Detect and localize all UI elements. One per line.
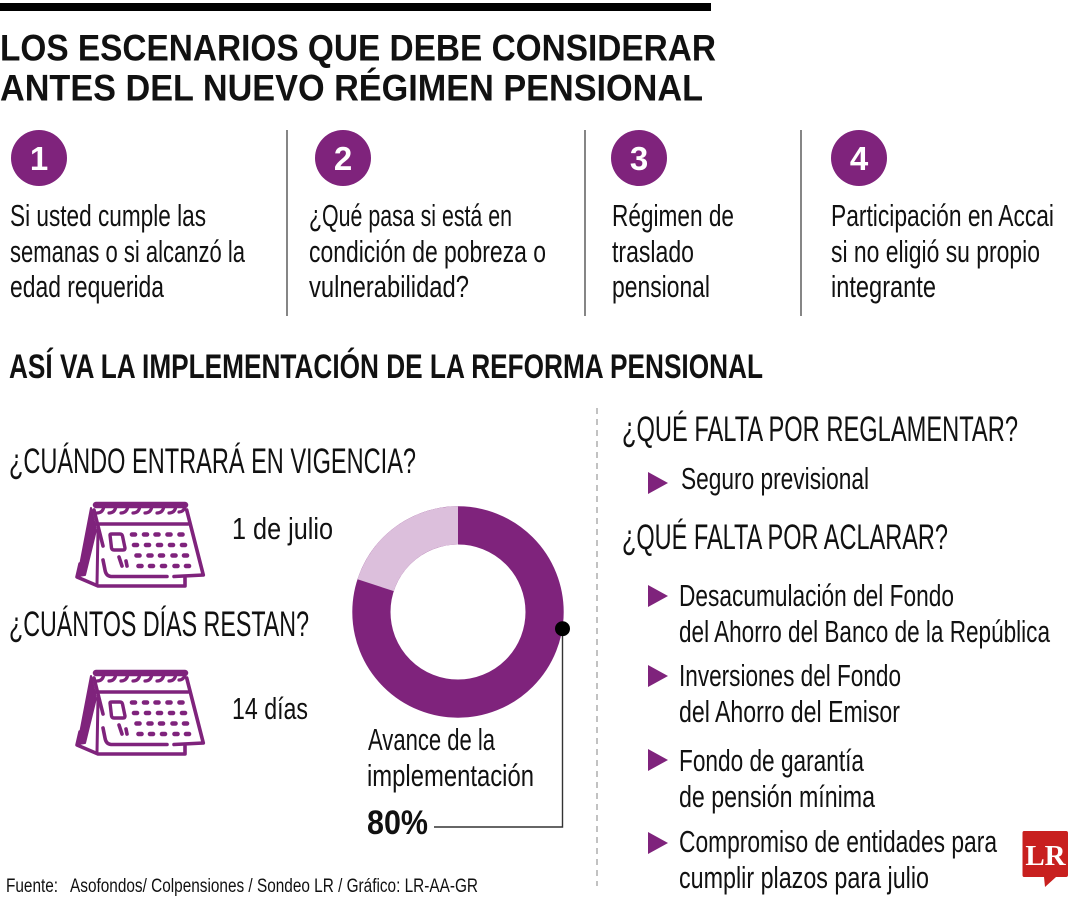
list item: compromiso: [648, 824, 998, 895]
icon: calendar: [77, 505, 203, 586]
donut chart: 80%: [358, 506, 545, 699]
list item: fondo de garantía: [648, 743, 876, 814]
callout text: implementación: [367, 758, 534, 793]
heading: cuándo entrará en vigencia: ¿CUÁNDO ENTRARÁ EN VIGENCIA?: [9, 442, 416, 481]
panel: scenario 1: semanas o si alcanzó la: [10, 234, 246, 269]
list item: desacumulación: Desacumulación del Fondo: [679, 578, 954, 613]
panel: scenario 3: [611, 130, 734, 304]
panel: scenario 3: 3: [630, 140, 648, 177]
section heading: ASÍ VA LA IMPLEMENTACIÓN DE LA REFORMA PENSIONAL: [9, 348, 763, 386]
icon: calendar: [77, 673, 203, 754]
panel: scenario 2: condición de pobreza o: [309, 234, 546, 269]
panel: scenario 4: [831, 130, 1054, 304]
list item: inversiones: del Ahorro del Emisor: [679, 694, 900, 729]
logo: LR: LR: [1025, 840, 1067, 872]
list item: desacumulación: [648, 578, 1051, 649]
panel: scenario 2: vulnerabilidad?: [309, 269, 469, 304]
panel: scenario 2: [309, 130, 546, 304]
list item: inversiones: Inversiones del Fondo: [679, 658, 901, 693]
panel: scenario 1: Si usted cumple las: [10, 198, 206, 233]
panel: scenario 3: traslado: [612, 234, 694, 269]
panel: scenario 4: integrante: [831, 269, 936, 304]
list item: seguro previsional: [648, 461, 869, 496]
panel: scenario 1: 1: [30, 140, 48, 177]
panel: scenario 4: 4: [850, 140, 869, 177]
title: LOS ESCENARIOS QUE DEBE CONSIDERAR: [0, 26, 716, 68]
panel: scenario 1: edad requerida: [10, 269, 165, 304]
list item: compromiso: cumplir plazos para julio: [679, 860, 929, 895]
list item: fondo de garantía: Fondo de garantía: [679, 743, 865, 778]
title: ANTES DEL NUEVO RÉGIMEN PENSIONAL: [0, 66, 703, 108]
title: [0, 26, 716, 108]
panel: scenario 2: ¿Qué pasa si está en: [309, 198, 512, 233]
panel: scenario 1: [10, 130, 246, 304]
logo: LR: [1022, 831, 1068, 887]
date value: 1 de julio: [232, 511, 333, 546]
panel: scenario 3: pensional: [612, 269, 710, 304]
list item: fondo de garantía: de pensión mínima: [679, 779, 876, 814]
panel: scenario 2: 2: [334, 140, 352, 177]
callout text: Avance de la: [368, 722, 496, 757]
days value: 14 días: [232, 691, 308, 726]
source: Fuente: Asofondos/ Colpensiones / Sondeo LR / Gráfico: LR-AA-GR: [6, 876, 478, 897]
heading: cuántos días restan: ¿CUÁNTOS DÍAS RESTAN?: [9, 605, 309, 644]
callout text: [367, 722, 534, 842]
list item: inversiones: [648, 658, 901, 729]
callout leader: [434, 621, 570, 827]
panel: scenario 3: Régimen de: [612, 198, 734, 233]
callout text: 80%: [367, 804, 428, 842]
list item: seguro previsional: Seguro previsional: [681, 461, 869, 496]
